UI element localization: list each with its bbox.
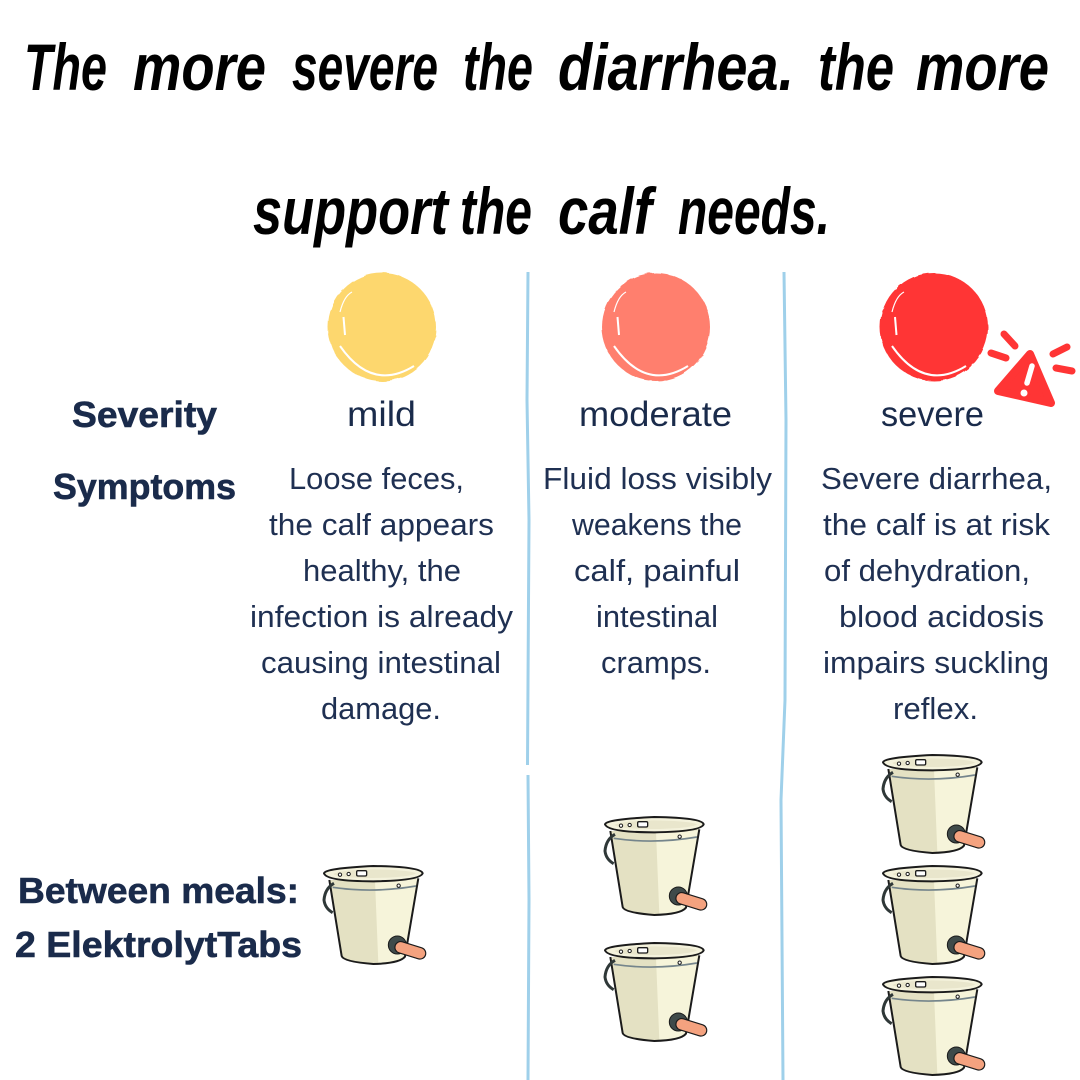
icon: bucket top	[605, 817, 704, 915]
panel: moderate column	[543, 273, 773, 1041]
title: the	[818, 30, 894, 104]
icon: bucket bottom	[605, 943, 704, 1041]
title: the	[460, 174, 532, 248]
row label: Between meals dosage	[15, 870, 302, 965]
symptoms text: mild: infection is already	[250, 599, 514, 634]
icon: bucket	[324, 866, 423, 964]
title: calf	[558, 174, 657, 248]
symptoms text: severe: the calf is at risk	[823, 507, 1050, 542]
symptoms text: moderate: Fluid loss visibly	[543, 461, 773, 496]
symptoms text: mild: Loose feces,	[289, 461, 464, 496]
symptoms text: mild	[250, 461, 514, 726]
row label: Between meals dosage: 2 ElektrolytTabs	[15, 924, 302, 965]
row label: Severity: Severity	[72, 394, 217, 435]
icon: bucket top	[883, 755, 982, 853]
row label: Symptoms: Symptoms	[53, 466, 236, 507]
severity label: severe: severe	[881, 395, 984, 434]
title: needs.	[678, 174, 830, 248]
title: severe	[292, 30, 438, 104]
row label: Between meals dosage: Between meals:	[18, 870, 299, 911]
title	[24, 30, 1049, 248]
symptoms text: severe: blood acidosis	[839, 599, 1044, 634]
symptoms text: moderate: intestinal	[596, 599, 718, 634]
symptoms text: moderate: cramps.	[601, 645, 711, 680]
title: support	[253, 174, 450, 248]
title: diarrhea.	[558, 30, 794, 104]
icon: mild severity circle	[328, 273, 436, 381]
title: the	[463, 30, 533, 104]
column dividers	[527, 272, 786, 1080]
icon: severe severity circle	[880, 273, 988, 381]
symptoms text: mild: the calf appears	[269, 507, 494, 542]
symptoms text: mild: healthy, the	[303, 553, 461, 588]
icon: bucket middle	[883, 866, 982, 964]
title: more	[133, 30, 266, 104]
panel: severe column	[821, 273, 1072, 1075]
icon: bucket bottom	[883, 977, 982, 1075]
symptoms text: moderate: calf, painful	[574, 553, 740, 588]
severity label: mild: mild	[347, 395, 416, 434]
symptoms text: moderate: weakens the	[571, 507, 742, 542]
title: more	[916, 30, 1049, 104]
panel: mild column	[250, 273, 514, 964]
symptoms text: mild: damage.	[321, 691, 441, 726]
symptoms text: severe: of dehydration,	[824, 553, 1030, 588]
symptoms text: severe: reflex.	[893, 691, 978, 726]
symptoms text: mild: causing intestinal	[261, 645, 501, 680]
icon: alert triangle with rays	[991, 334, 1072, 403]
symptoms text: severe: impairs suckling	[823, 645, 1049, 680]
symptoms text: moderate	[543, 461, 773, 680]
title: The	[24, 30, 107, 104]
symptoms text: severe: Severe diarrhea,	[821, 461, 1052, 496]
severity label: moderate: moderate	[579, 395, 732, 434]
icon: moderate severity circle	[602, 273, 710, 381]
symptoms text: severe	[821, 461, 1052, 726]
